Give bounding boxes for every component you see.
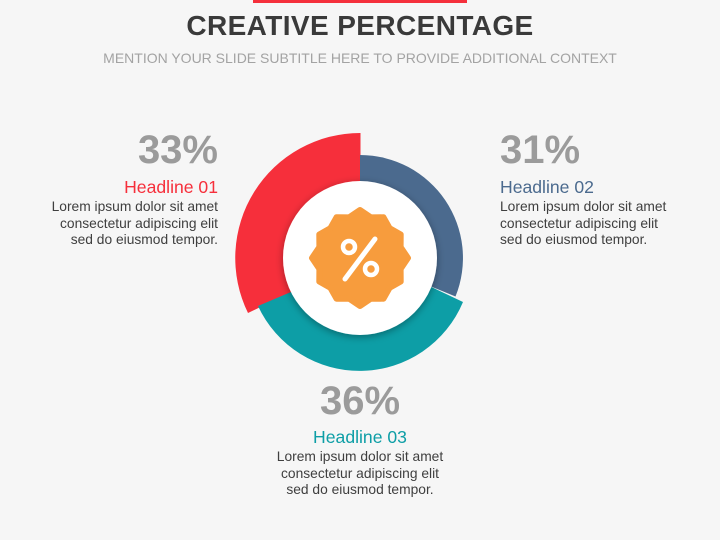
- subtitle: MENTION YOUR SLIDE SUBTITLE HERE TO PROVIDE ADDITIONAL CONTEXT: [103, 50, 617, 66]
- block: 33% headline 01: [52, 128, 218, 247]
- block: 31% headline 02: sed do eiusmod tempor.: [500, 232, 647, 247]
- block: 36% headline 03: consectetur adipiscing elit: [281, 466, 439, 480]
- top accent bar: [253, 0, 467, 3]
- title: CREATIVE PERCENTAGE: [186, 10, 534, 41]
- block: 31% headline 02: 31%: [500, 128, 580, 172]
- block: 33% headline 01: sed do eiusmod tempor.: [71, 232, 218, 247]
- block: 31% headline 02: Headline 02: [500, 177, 594, 197]
- block: 33% headline 01: Lorem ipsum dolor sit amet: [52, 199, 218, 214]
- block: 33% headline 01: Headline 01: [124, 177, 218, 197]
- segment: teal 36%: [258, 284, 463, 371]
- block: 31% headline 02: consectetur adipiscing elit: [500, 216, 658, 230]
- block: 33% headline 01: 33%: [138, 128, 218, 172]
- block: 31% headline 02: Lorem ipsum dolor sit amet: [500, 199, 666, 214]
- segment: red 33%: [235, 133, 360, 313]
- block: 36% headline 03: Lorem ipsum dolor sit amet: [277, 449, 443, 464]
- segment: blue 31%: [360, 155, 463, 296]
- block: 31% headline 02: [500, 128, 666, 247]
- block: 36% headline 03: 36%: [320, 379, 400, 423]
- block: 36% headline 03: sed do eiusmod tempor.: [286, 482, 434, 497]
- block: 33% headline 01: consectetur adipiscing elit: [60, 216, 218, 230]
- block: 36% headline 03: Headline 03: [313, 427, 407, 447]
- block: 36% headline 03: [277, 379, 444, 497]
- center circle: [283, 181, 437, 335]
- icon: percent badge: [312, 210, 408, 306]
